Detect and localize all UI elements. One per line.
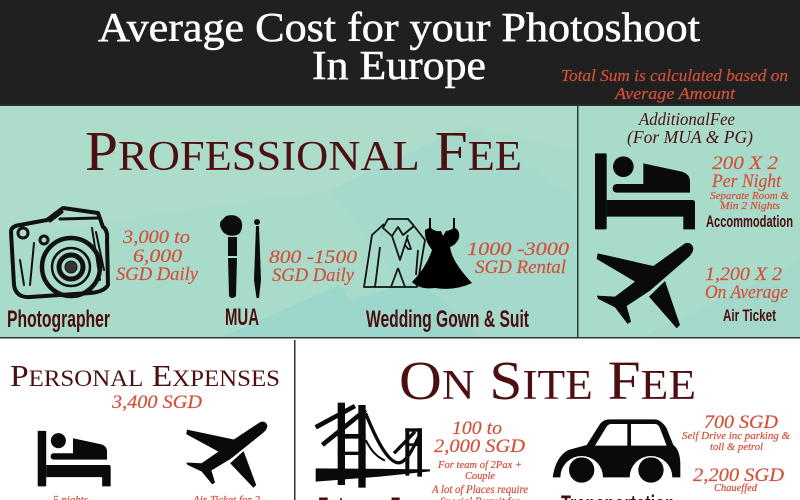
label: air ticket: Air Ticket xyxy=(723,306,776,325)
icon: plane xyxy=(597,243,693,328)
panel: on site fee xyxy=(316,350,790,500)
price: entrance fee: 100 to xyxy=(452,418,502,439)
price: air ticket: On Average xyxy=(705,282,788,303)
icon: suit and dress xyxy=(364,218,472,289)
price: photographer: 6,000 xyxy=(133,246,183,267)
price: mua xyxy=(269,247,358,286)
price: air ticket xyxy=(705,264,788,303)
label: mua: MUA xyxy=(225,304,259,331)
price: mua: SGD Daily xyxy=(272,265,355,286)
heading: additional fee xyxy=(627,109,753,148)
price: accommodation: Separate Room & xyxy=(710,190,789,202)
heading: professional fee: PROFESSIONAL FEE xyxy=(85,121,522,183)
heading: additional fee: AdditionalFee xyxy=(638,109,735,129)
price: accommodation xyxy=(710,153,789,212)
price: photographer: SGD Daily xyxy=(116,264,199,285)
price: photographer: 3,000 to xyxy=(122,227,190,248)
icon: makeup brushes xyxy=(220,215,261,298)
price: self drive: toll & petrol xyxy=(710,441,763,453)
price: chauffeured xyxy=(693,465,784,494)
title xyxy=(98,4,701,88)
price: entrance fee: A lot of Places require xyxy=(431,482,529,496)
price: mua: 800 -1500 xyxy=(269,247,358,268)
panel: header xyxy=(0,0,800,105)
price: wedding xyxy=(467,239,570,278)
suit xyxy=(364,219,425,287)
price: chauffeured: Chaueffed xyxy=(714,482,757,494)
title: In Europe xyxy=(312,42,486,88)
icon: camera xyxy=(11,208,108,297)
dress xyxy=(412,218,472,289)
price: wedding: SGD Rental xyxy=(475,257,566,278)
price: accommodation: Min 2 Nights xyxy=(719,200,780,212)
icon: plane small xyxy=(186,422,267,488)
icon: bridge xyxy=(316,403,430,488)
price: self drive: Self Drive inc parking & xyxy=(682,430,790,442)
price: entrance fee: Couple xyxy=(465,470,495,482)
price: self drive: 700 SGD xyxy=(704,412,778,433)
icon: bed small xyxy=(38,431,111,486)
price: wedding: 1000 -3000 xyxy=(467,239,570,260)
label: photographer: Photographer xyxy=(7,306,110,333)
price: photographer xyxy=(116,227,199,285)
panel: personal expenses xyxy=(10,340,296,500)
price: air ticket: 1,200 X 2 xyxy=(705,264,783,285)
heading: additional fee: (For MUA & PG) xyxy=(627,127,753,148)
icon: car xyxy=(553,419,680,483)
icon: bed xyxy=(595,153,695,229)
price: self drive xyxy=(682,412,790,453)
price: entrance fee: 2,000 SGD xyxy=(434,436,525,457)
price: accommodation: Per Night xyxy=(711,171,782,192)
price: chauffeured: 2,200 SGD xyxy=(693,465,784,486)
price: personal total: 3,400 SGD xyxy=(111,392,202,413)
note: total sum xyxy=(561,66,788,103)
note: total sum: Average Amount xyxy=(614,84,736,103)
panel: professional fee xyxy=(0,104,800,338)
price: accommodation: 200 X 2 xyxy=(712,153,779,174)
title: Average Cost for your Photoshoot xyxy=(98,4,701,50)
price: entrance fee: For team of 2Pax + xyxy=(437,459,522,471)
note: total sum: Total Sum is calculated based on xyxy=(561,66,788,85)
heading: on site fee: ON SITE FEE xyxy=(399,350,696,411)
price: entrance fee xyxy=(431,418,529,500)
panel: additional fee xyxy=(577,105,793,338)
label: wedding gown and suit: Wedding Gown & Suit xyxy=(366,306,529,333)
heading: personal expenses: PERSONAL EXPENSES xyxy=(10,358,280,393)
